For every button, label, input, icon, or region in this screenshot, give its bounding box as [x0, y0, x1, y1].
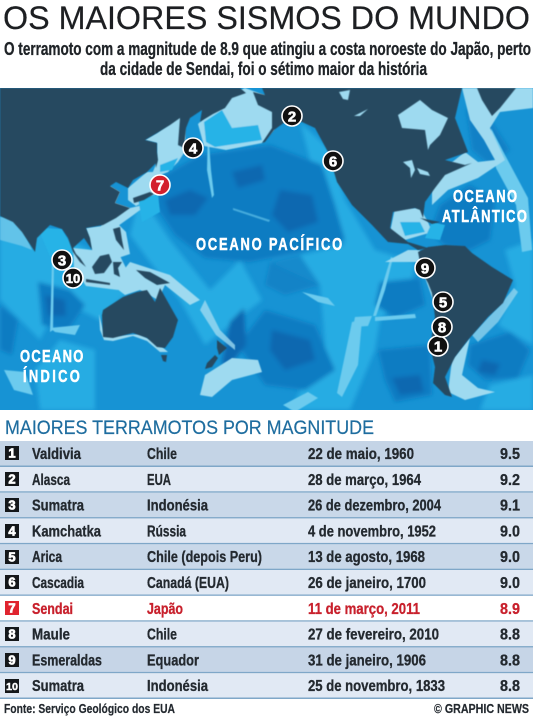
marker 9 [415, 258, 435, 278]
subtitle [4, 39, 531, 79]
row 1: Chile [147, 446, 177, 463]
marker 2 [282, 106, 302, 126]
row 3: 9.1 [500, 498, 520, 515]
row 9: Equador [147, 652, 199, 669]
row 6: 9.0 [500, 575, 520, 592]
row 4: Kamchatka [32, 523, 101, 540]
row 5: Arica [32, 549, 62, 566]
land: Australia [102, 288, 178, 348]
ocean labels: ÍNDICO [23, 365, 80, 387]
land: South America [418, 245, 513, 397]
row 2: 9.2 [500, 472, 520, 489]
ridges [4, 128, 532, 412]
row 5: 13 de agosto, 1968 [308, 549, 425, 566]
ocean labels: OCEANO [20, 347, 83, 367]
land: Caribbean [420, 218, 440, 224]
row 4: Rússia [147, 523, 186, 540]
row 6: Cascadia [32, 575, 84, 592]
row 7 highlighted: Sendai [32, 601, 73, 618]
marker 4 [183, 138, 203, 158]
marker 6 [323, 151, 343, 171]
marker 7: 7 [156, 178, 164, 194]
row 8: 8 [8, 626, 16, 642]
marker 5 [433, 292, 453, 312]
land: Indonesia and New Guinea [76, 254, 86, 268]
row 7 highlighted [0, 596, 533, 622]
marker 4: 4 [189, 140, 198, 158]
row 8: 8.8 [500, 627, 520, 644]
row 8 [0, 622, 533, 648]
ocean labels: OCEANO PACÍFICO [196, 233, 342, 255]
row 6: 6 [8, 574, 16, 590]
row 9: 9 [8, 652, 16, 668]
row 8: 27 de fevereiro, 2010 [308, 627, 439, 644]
table heading: MAIORES TERRAMOTOS POR MAGNITUDE [5, 417, 374, 439]
row 1: 9.5 [500, 446, 520, 463]
marker 1 [428, 336, 448, 356]
row 9: Esmeraldas [32, 652, 102, 669]
row 7 highlighted: 8.9 [500, 601, 520, 618]
row 4: 9.0 [500, 523, 520, 540]
row 7 highlighted: Japão [147, 601, 183, 618]
row 8: Chile [147, 627, 177, 644]
ocean labels [20, 187, 527, 387]
row 5: 9.0 [500, 549, 520, 566]
row 7 highlighted: 7 [8, 600, 16, 616]
land: Greenland [477, 88, 516, 116]
marker 2: 2 [288, 108, 296, 126]
row 2 [0, 467, 533, 493]
marker 3 [52, 250, 72, 270]
land: Japan and Sakhalin [133, 192, 154, 203]
title: OS MAIORES SISMOS DO MUNDO [3, 0, 530, 36]
table [0, 441, 533, 699]
row 9 [0, 647, 533, 673]
row 1 [0, 441, 533, 467]
row 10: 8.8 [500, 678, 520, 695]
row 10: 25 de novembro, 1833 [308, 678, 445, 695]
row 2: EUA [147, 472, 171, 489]
row 3: Indonésia [147, 498, 208, 515]
row 6: 26 de janeiro, 1700 [308, 575, 426, 592]
row 6: Canadá (EUA) [147, 575, 229, 592]
land: New Zealand [217, 340, 227, 355]
marker 7 [150, 175, 170, 195]
row 2: 2 [8, 472, 16, 486]
row 3: 26 de dezembro, 2004 [308, 498, 441, 515]
marker 5: 5 [439, 294, 447, 312]
mid-shelf blues [38, 110, 445, 256]
row 7 highlighted: 11 de março, 2011 [308, 601, 420, 618]
marker 10: 10 [66, 271, 80, 286]
row 4: 4 [8, 524, 16, 538]
row 10 [0, 673, 533, 699]
row 10: 10 [6, 682, 18, 693]
land: Asia [0, 88, 246, 262]
row 5: 5 [8, 550, 16, 564]
ocean labels: ATLÂNTICO [442, 205, 527, 227]
row 9: 8.8 [500, 652, 520, 669]
marker 3: 3 [58, 252, 66, 270]
marker 8: 8 [438, 320, 446, 336]
marker 8 [432, 317, 452, 337]
marker 6: 6 [329, 154, 337, 170]
row 5 [0, 544, 533, 570]
row 10: Sumatra [32, 678, 84, 695]
row 1: 22 de maio, 1960 [308, 446, 414, 463]
marker 10 [63, 268, 83, 288]
ocean depth: bright margins [0, 122, 533, 410]
row 9: 31 de janeiro, 1906 [308, 652, 426, 669]
row 10: Indonésia [147, 678, 208, 695]
row 3: Sumatra [32, 498, 84, 515]
row 2: Alasca [32, 472, 70, 489]
marker 1: 1 [434, 338, 442, 356]
row 3 [0, 493, 533, 519]
continental shelves [0, 88, 533, 400]
row 6 [0, 570, 533, 596]
world map [0, 88, 533, 412]
marker 9: 9 [421, 260, 429, 278]
row 4 [0, 518, 533, 544]
row 4: 4 de novembro, 1952 [308, 523, 436, 540]
row 3: 3 [8, 498, 16, 512]
hudson bay and great lakes [339, 90, 448, 178]
row 2: 28 de março, 1964 [308, 472, 421, 489]
source note: Fonte: Serviço Geológico dos EUA [4, 701, 175, 716]
land: North America [253, 88, 472, 250]
row 1: 1 [8, 446, 16, 460]
subtitle: da cidade de Sendai, foi o sétimo maior da história [100, 59, 428, 79]
row 8: Maule [32, 627, 70, 644]
ocean depth: deep basins [0, 108, 530, 402]
ocean labels: OCEANO [453, 187, 517, 207]
row 5: Chile (depois Peru) [147, 549, 262, 566]
row 1: Valdivia [32, 446, 81, 463]
